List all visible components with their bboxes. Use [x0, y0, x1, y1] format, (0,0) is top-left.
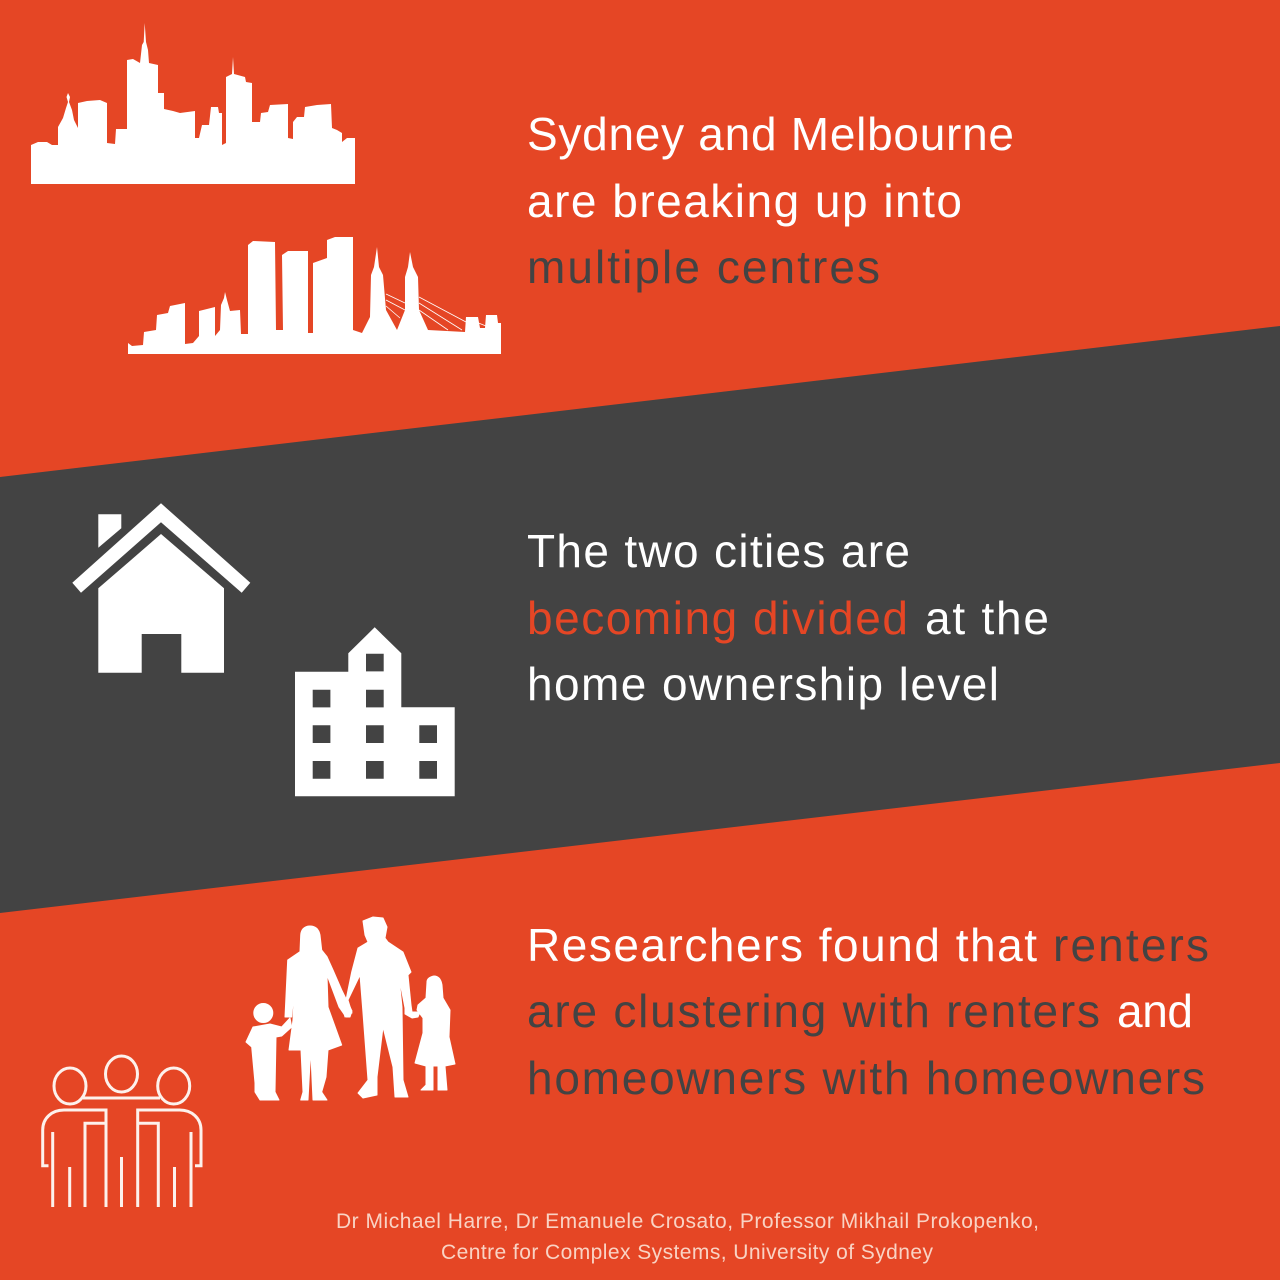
man: [343, 917, 420, 1098]
heading: clustering: renters: [1053, 919, 1209, 971]
woman: [285, 926, 352, 1100]
heading: home ownership: The two cities are: [527, 525, 910, 577]
icon: group of people outline: [43, 1056, 201, 1207]
girl: [415, 976, 455, 1090]
heading: home ownership: at the: [925, 592, 1049, 644]
panel: dark diagonal band: [0, 326, 1280, 913]
heading: clustering: and: [1117, 985, 1193, 1037]
heading: multiple centres: [527, 108, 1014, 293]
boy: [254, 1004, 273, 1022]
icon: Melbourne skyline: [128, 237, 501, 354]
credits: Dr Michael Harre, Dr Emanuele Crosato, Professor Mikhail Prokopenko,: [336, 1210, 1039, 1233]
heading: clustering: homeowners with homeowners: [527, 1052, 1205, 1104]
heading: multiple centres: multiple centres: [527, 241, 880, 293]
heading: home ownership: home ownership level: [527, 658, 999, 710]
heading: multiple centres: Sydney and Melbourne: [527, 108, 1014, 160]
heading: clustering: Researchers found that: [527, 919, 1037, 971]
credits: Centre for Complex Systems, University of Sydney: [441, 1241, 934, 1264]
icon: apartment building: [295, 627, 455, 796]
heading: clustering: [527, 919, 1209, 1104]
credits: [336, 1210, 1039, 1264]
heading: home ownership: [527, 525, 1049, 710]
heading: clustering: are clustering with renters: [527, 985, 1100, 1037]
heading: multiple centres: are breaking up into: [527, 175, 962, 227]
icon: house: [72, 503, 250, 673]
icon: family silhouette: [246, 917, 455, 1100]
heading: home ownership: becoming divided: [527, 592, 908, 644]
icon: Sydney skyline: [31, 23, 355, 184]
